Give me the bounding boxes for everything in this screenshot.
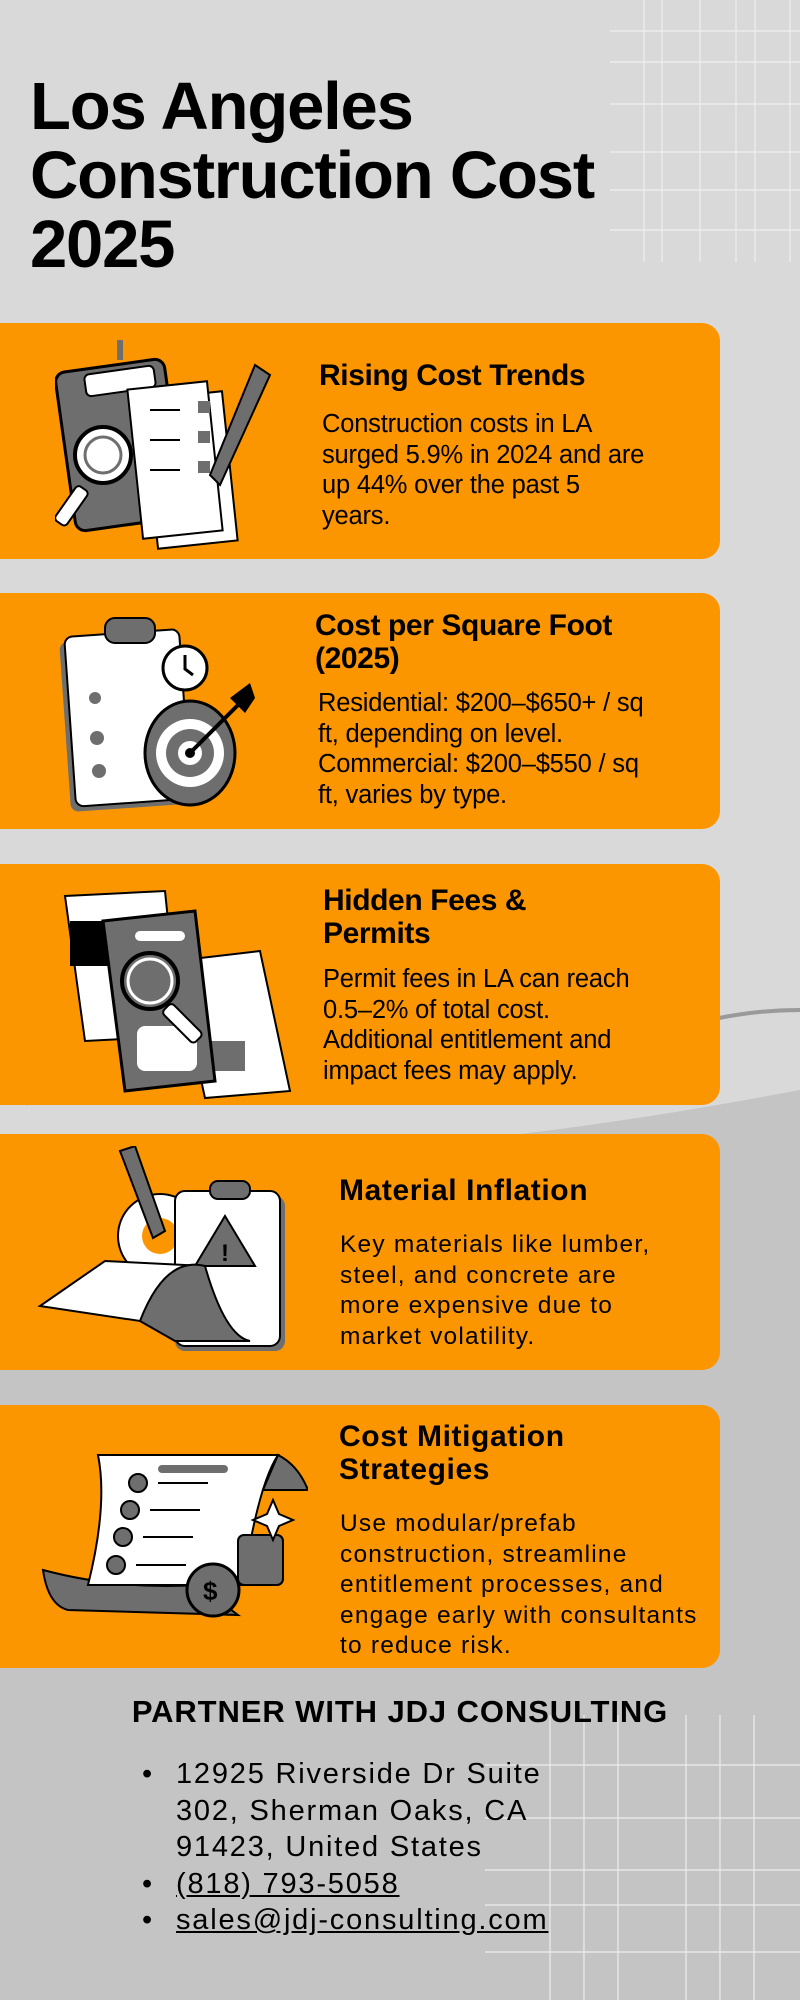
- contact list: 91423, United States: [176, 1831, 483, 1863]
- body text: Permit fees in LA can reach: [323, 965, 629, 993]
- title: 2025: [30, 207, 174, 282]
- body text: Key materials like lumber,: [340, 1231, 650, 1258]
- body text: to reduce risk.: [340, 1632, 512, 1659]
- body text: Residential: $200–$650+ / sq: [318, 689, 643, 717]
- contact list: 12925 Riverside Dr Suite: [176, 1758, 542, 1790]
- contact list: •: [142, 1904, 154, 1936]
- icon: pencil, gear, warning clipboard: !: [221, 1240, 229, 1267]
- icon: documents with magnifier: [64, 890, 292, 1100]
- body text: Commercial: $200–$550 / sq: [318, 750, 639, 778]
- body text: more expensive due to: [340, 1292, 613, 1319]
- body text: years.: [322, 502, 390, 530]
- body text: 0.5–2% of total cost.: [323, 996, 550, 1024]
- body text: Construction costs in LA: [322, 410, 592, 438]
- heading: Strategies: [339, 1453, 490, 1486]
- body text: ft, depending on level.: [318, 720, 563, 748]
- contact list: 302, Sherman Oaks, CA: [176, 1794, 528, 1826]
- heading: Material Inflation: [339, 1174, 588, 1207]
- panel: cost per square foot: [0, 593, 720, 829]
- heading: [339, 1420, 565, 1486]
- heading: partner: PARTNER WITH JDJ CONSULTING: [132, 1694, 668, 1729]
- contact list: •: [142, 1868, 154, 1900]
- icon: clipboard with magnifier and pen: [55, 340, 272, 550]
- panel: material inflation: [0, 1134, 720, 1370]
- icon: receipt scroll with coins: $: [203, 1576, 218, 1606]
- heading: [315, 609, 612, 675]
- contact list: (818) 793-5058: [176, 1868, 400, 1900]
- body text: [340, 1510, 698, 1659]
- contact list: sales@jdj-consulting.com: [176, 1904, 548, 1936]
- title: [30, 69, 594, 282]
- panel: rising cost trends: [0, 323, 720, 559]
- heading: Hidden Fees &: [323, 884, 526, 917]
- heading: Cost Mitigation: [339, 1420, 565, 1453]
- heading: Permits: [323, 917, 430, 950]
- title: Construction Cost: [30, 138, 594, 213]
- panel: cost mitigation: [0, 1405, 720, 1668]
- body text: entitlement processes, and: [340, 1571, 664, 1598]
- body text: [340, 1231, 650, 1350]
- heading: (2025): [315, 642, 399, 675]
- body text: engage early with consultants: [340, 1602, 698, 1628]
- body text: surged 5.9% in 2024 and are: [322, 440, 644, 468]
- body text: [323, 965, 629, 1084]
- title: Los Angeles: [30, 69, 413, 144]
- icon: pencil, gear, warning clipboard: [38, 1146, 285, 1351]
- heading: Cost per Square Foot: [315, 609, 612, 642]
- icon: clipboard with target: [60, 617, 255, 812]
- body text: [318, 689, 643, 808]
- body text: impact fees may apply.: [323, 1056, 578, 1084]
- body text: Additional entitlement and: [323, 1026, 611, 1054]
- panel: hidden fees: [0, 864, 720, 1105]
- body text: steel, and concrete are: [340, 1262, 617, 1288]
- body text: market volatility.: [340, 1322, 535, 1350]
- icon: receipt scroll with coins: [42, 1454, 308, 1618]
- heading: Rising Cost Trends: [319, 359, 585, 392]
- contact list: •: [142, 1758, 154, 1790]
- body text: Use modular/prefab: [340, 1510, 577, 1537]
- body text: up 44% over the past 5: [322, 471, 580, 499]
- contact list: [142, 1758, 548, 1936]
- heading: [323, 884, 526, 950]
- body text: [322, 410, 644, 530]
- body text: construction, streamline: [340, 1540, 628, 1568]
- body text: ft, varies by type.: [318, 780, 507, 808]
